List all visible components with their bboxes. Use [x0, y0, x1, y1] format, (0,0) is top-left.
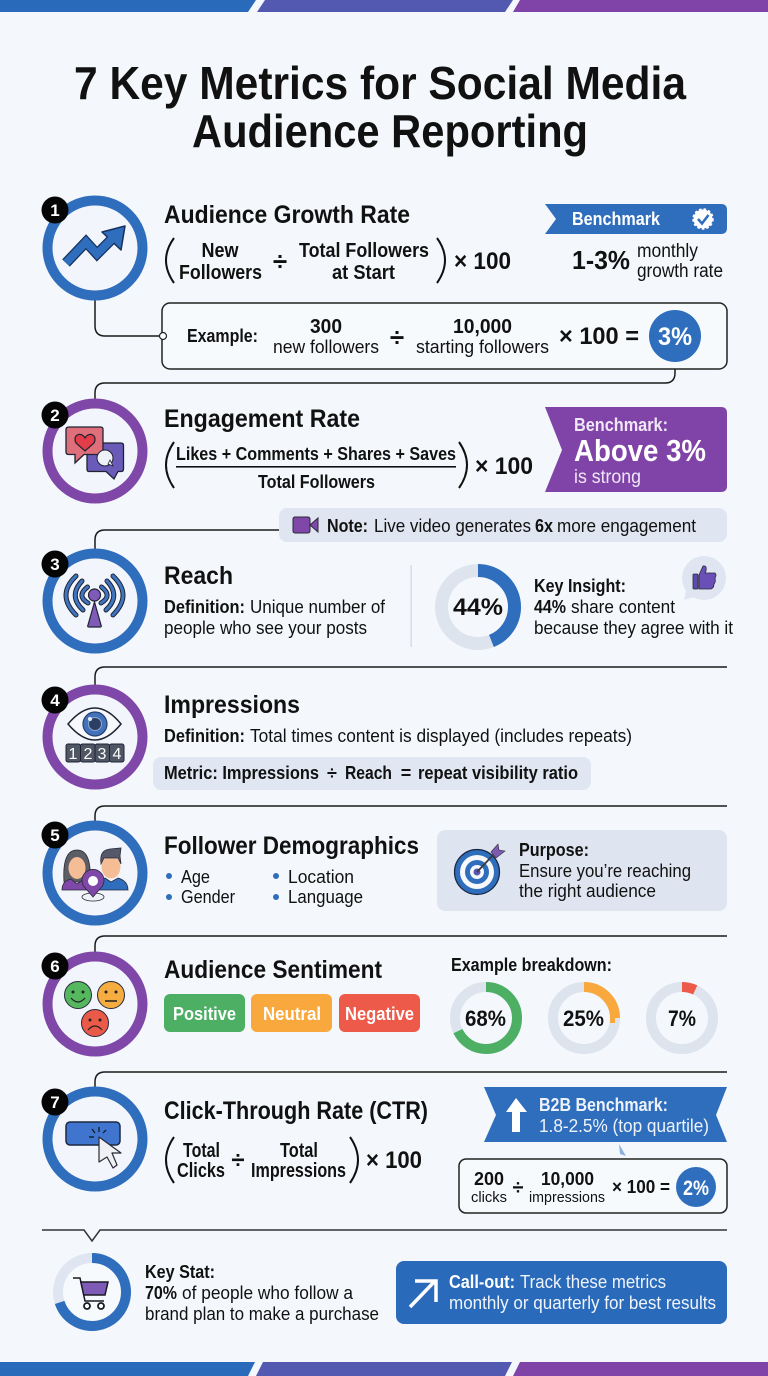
key insight: share content — [571, 597, 675, 617]
purpose panel — [437, 830, 727, 911]
formula: at Start — [332, 262, 395, 284]
key insight — [534, 576, 733, 638]
sentiment pill: positive: Positive — [173, 1004, 236, 1024]
icon: eye and counter in purple ring — [48, 690, 142, 784]
key insight: because they agree with it — [534, 618, 733, 638]
example box: starting followers — [416, 337, 549, 357]
definition: Unique number of — [250, 597, 386, 617]
breakdown label: Example breakdown: — [451, 955, 612, 975]
key stat text: of people who follow a — [182, 1283, 354, 1303]
formula: Clicks — [177, 1160, 225, 1182]
benchmark value: monthly — [637, 241, 698, 262]
key insight: Key Insight: — [534, 576, 626, 596]
connector: metric 4 to metric 5 — [95, 806, 727, 821]
benchmark value: 1-3% — [572, 245, 630, 275]
panel: metric 3 reach — [42, 550, 733, 648]
panel: metric 6 audience sentiment — [42, 952, 713, 1052]
donut chart: 25% neutral: 25% — [563, 1006, 604, 1031]
key stat text: 70% — [145, 1283, 177, 1303]
donut chart: 68% positive — [455, 987, 517, 1049]
note: more engagement — [557, 516, 696, 536]
sentiment pill: neutral: Neutral — [263, 1004, 321, 1024]
formula: ÷ — [231, 1147, 245, 1174]
title: Audience Reporting — [192, 105, 588, 157]
number badge 6: 6 — [50, 957, 60, 976]
panel: metric 2 engagement rate — [42, 402, 727, 542]
divider with pointer — [42, 1230, 727, 1241]
donut chart: 68% positive: 68% — [465, 1006, 506, 1031]
demographics list: Gender — [181, 887, 235, 907]
icon: diagonal arrow — [410, 1281, 436, 1307]
number badge 4 — [42, 686, 68, 714]
benchmark box — [545, 407, 727, 492]
key insight: 44% — [534, 597, 566, 617]
formula: Total — [280, 1140, 318, 1162]
ctr example box: clicks — [471, 1189, 507, 1206]
icon: eye and counter in purple ring: 3 — [98, 746, 107, 763]
definition: Total times content is displayed (includes repeats) — [250, 726, 632, 746]
callout — [396, 1261, 727, 1324]
ctr example box: × 100 = — [612, 1177, 670, 1197]
ctr example box — [459, 1159, 727, 1213]
ctr example box: 200 — [474, 1169, 504, 1189]
benchmark value: growth rate — [637, 261, 723, 282]
title — [74, 57, 686, 157]
ctr example box: ÷ — [513, 1177, 524, 1199]
heading: Click-Through Rate (CTR) — [164, 1097, 428, 1125]
ctr example box: impressions — [529, 1189, 605, 1206]
heading: Impressions — [164, 691, 300, 719]
definition: Definition: — [164, 597, 245, 617]
icon: chat bubbles in purple ring — [48, 404, 142, 498]
ctr example box: 2% — [683, 1177, 709, 1200]
icon: shopping cart — [73, 1278, 108, 1309]
number badge 2: 2 — [50, 406, 60, 425]
panel: metric 1 audience growth rate — [42, 196, 727, 369]
purpose panel: Ensure you’re reaching — [519, 861, 691, 881]
demographics list — [166, 867, 363, 907]
metric pill: ÷ — [327, 763, 337, 783]
number badge 7 — [42, 1088, 68, 1116]
example box: ÷ — [390, 322, 404, 352]
number badge 6 — [42, 952, 68, 980]
donut chart: 7% negative: 7% — [668, 1006, 696, 1031]
benchmark ribbon — [545, 204, 727, 234]
note: Note: — [327, 516, 368, 536]
donut chart: 25% neutral — [553, 987, 615, 1049]
connector: metric 6 to metric 7 — [95, 1072, 727, 1088]
formula: Total — [183, 1140, 220, 1162]
number badge 2 — [42, 402, 68, 428]
connector: note to metric 3 — [95, 530, 279, 549]
purpose panel: Purpose: — [519, 840, 589, 860]
example box: 3% — [658, 323, 692, 351]
formula — [166, 442, 533, 492]
example box: Example: — [187, 326, 258, 346]
number badge 1 — [42, 196, 68, 224]
note: Live video generates — [374, 516, 531, 536]
sentiment pill: neutral — [251, 994, 332, 1032]
icon: people and map pin in blue ring — [48, 826, 142, 920]
formula: Total Followers — [258, 472, 375, 492]
definition — [164, 597, 386, 638]
icon: eye and counter in purple ring: 4 — [113, 746, 122, 763]
example box: 300 — [310, 316, 342, 338]
metric pill — [153, 757, 591, 790]
demographics list: Language — [288, 887, 363, 907]
benchmark box: is strong — [574, 467, 641, 488]
number badge 5: 5 — [50, 826, 60, 845]
icon: video camera — [293, 517, 318, 533]
formula — [166, 238, 511, 284]
example box: new followers — [273, 337, 379, 357]
heading: Follower Demographics — [164, 832, 419, 860]
formula: × 100 — [475, 453, 533, 480]
heading: Reach — [164, 562, 233, 590]
b2b benchmark ribbon — [484, 1087, 727, 1142]
benchmark box: Benchmark: — [574, 415, 668, 435]
panel: metric 4 impressions — [42, 686, 632, 790]
donut chart: 44% — [442, 570, 514, 644]
icon: up arrow — [506, 1098, 527, 1132]
formula: Followers — [179, 262, 262, 284]
number badge 3: 3 — [50, 555, 60, 574]
panel: key stat — [58, 1258, 379, 1326]
metric pill: Metric: Impressions — [164, 763, 319, 783]
sentiment pill: negative — [339, 994, 420, 1032]
number badge 3 — [42, 550, 68, 578]
icon: growth arrow in blue ring — [48, 200, 142, 296]
metric pill: repeat visibility ratio — [418, 763, 578, 783]
connector: metric 3 to metric 4 — [95, 667, 727, 685]
definition: people who see your posts — [164, 618, 367, 638]
icon: button and cursor in blue ring — [48, 1092, 142, 1186]
formula: New — [202, 240, 239, 262]
example box: 10,000 — [453, 316, 512, 338]
heading: Audience Growth Rate — [164, 201, 410, 229]
metric pill: = — [401, 763, 411, 783]
connector: metric 5 to metric 6 — [95, 936, 727, 952]
metric pill: Reach — [345, 763, 392, 783]
connector: example box to metric 2 — [95, 369, 675, 400]
demographics list: Age — [181, 867, 210, 887]
formula: × 100 — [366, 1147, 422, 1174]
formula: Likes + Comments + Shares + Saves — [176, 444, 456, 464]
icon: broadcast antenna in blue ring — [48, 554, 142, 648]
benchmark value — [572, 241, 723, 282]
key stat text: brand plan to make a purchase — [145, 1304, 379, 1324]
heading: Engagement Rate — [164, 405, 360, 433]
top colour bar — [0, 0, 768, 12]
note — [279, 508, 727, 542]
panel: metric 7 click-through rate — [42, 1087, 727, 1213]
callout: Call-out: — [449, 1272, 515, 1292]
b2b benchmark ribbon: B2B Benchmark: — [539, 1095, 668, 1115]
bottom colour bar — [0, 1362, 768, 1376]
definition: Definition: — [164, 726, 245, 746]
number badge 5 — [42, 822, 68, 848]
sentiment pill: positive — [164, 994, 245, 1032]
panel: metric 5 follower demographics — [42, 822, 727, 920]
b2b benchmark ribbon: 1.8-2.5% (top quartile) — [539, 1116, 709, 1136]
icon: verified check — [694, 210, 712, 228]
example box — [160, 303, 727, 369]
number badge 4: 4 — [50, 691, 60, 710]
icon: target with dart — [454, 844, 505, 894]
formula: × 100 — [454, 248, 511, 275]
heading: Audience Sentiment — [164, 956, 383, 984]
title: 7 Key Metrics for Social Media — [74, 57, 686, 109]
number badge 1: 1 — [50, 201, 60, 220]
purpose panel: the right audience — [519, 881, 656, 901]
benchmark ribbon: Benchmark — [572, 209, 661, 229]
number badge 7: 7 — [50, 1093, 60, 1112]
formula — [166, 1137, 422, 1183]
callout: monthly or quarterly for best results — [449, 1293, 716, 1313]
donut chart: 44%: 44% — [453, 594, 503, 621]
benchmark box: Above 3% — [574, 433, 706, 468]
formula: ÷ — [273, 246, 287, 276]
ctr example box: 10,000 — [541, 1169, 594, 1189]
connector: metric 1 to example box — [95, 300, 160, 336]
callout: Track these metrics — [520, 1272, 666, 1292]
donut chart: 7% negative — [651, 987, 713, 1049]
donut chart: 70% with cart icon — [58, 1258, 126, 1326]
key stat text — [145, 1262, 379, 1324]
icon: eye and counter in purple ring: 2 — [84, 746, 93, 763]
key stat text: Key Stat: — [145, 1262, 215, 1282]
note: 6x — [535, 516, 553, 536]
demographics list: Location — [288, 867, 354, 887]
sentiment pill: negative: Negative — [345, 1004, 414, 1024]
icon: emoji faces in purple ring — [48, 956, 142, 1052]
icon: thumbs up bubble — [682, 556, 726, 600]
icon: eye and counter in purple ring: 1 — [69, 746, 78, 763]
formula: Impressions — [251, 1160, 346, 1182]
formula: Total Followers — [299, 240, 429, 262]
example box: × 100 = — [559, 323, 639, 350]
